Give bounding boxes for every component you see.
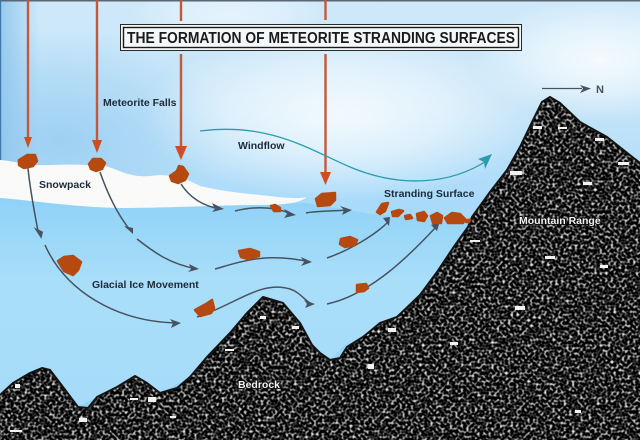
windflow arrow (200, 129, 492, 181)
glacial ice movement arrows (28, 168, 440, 328)
meteorites (19, 155, 470, 316)
label: Mountain Range: Mountain Range (519, 215, 601, 227)
label: Bedrock: Bedrock (238, 379, 280, 391)
arrow: fall 3 (175, 0, 187, 160)
snowpack (0, 160, 307, 208)
glacial ice body (0, 198, 472, 407)
label: Stranding Surface: Stranding Surface (384, 188, 475, 200)
label: Snowpack: Snowpack (39, 179, 91, 191)
label: Windflow: Windflow (238, 140, 285, 152)
arrow: fall 4 (320, 0, 331, 185)
meteorite fall arrows (24, 0, 331, 185)
arrow: fall 2 (92, 0, 102, 153)
label: Glacial Ice Movement: Glacial Ice Movement (92, 279, 199, 291)
north arrow (542, 84, 604, 96)
N label: N (596, 84, 604, 96)
title box (120, 24, 522, 50)
title text: THE FORMATION OF METEORITE STRANDING SURFACES (127, 30, 515, 47)
label: Meteorite Falls: Meteorite Falls (103, 97, 177, 109)
bedrock and mountain range (0, 90, 640, 440)
arrow: fall 1 (24, 0, 32, 148)
